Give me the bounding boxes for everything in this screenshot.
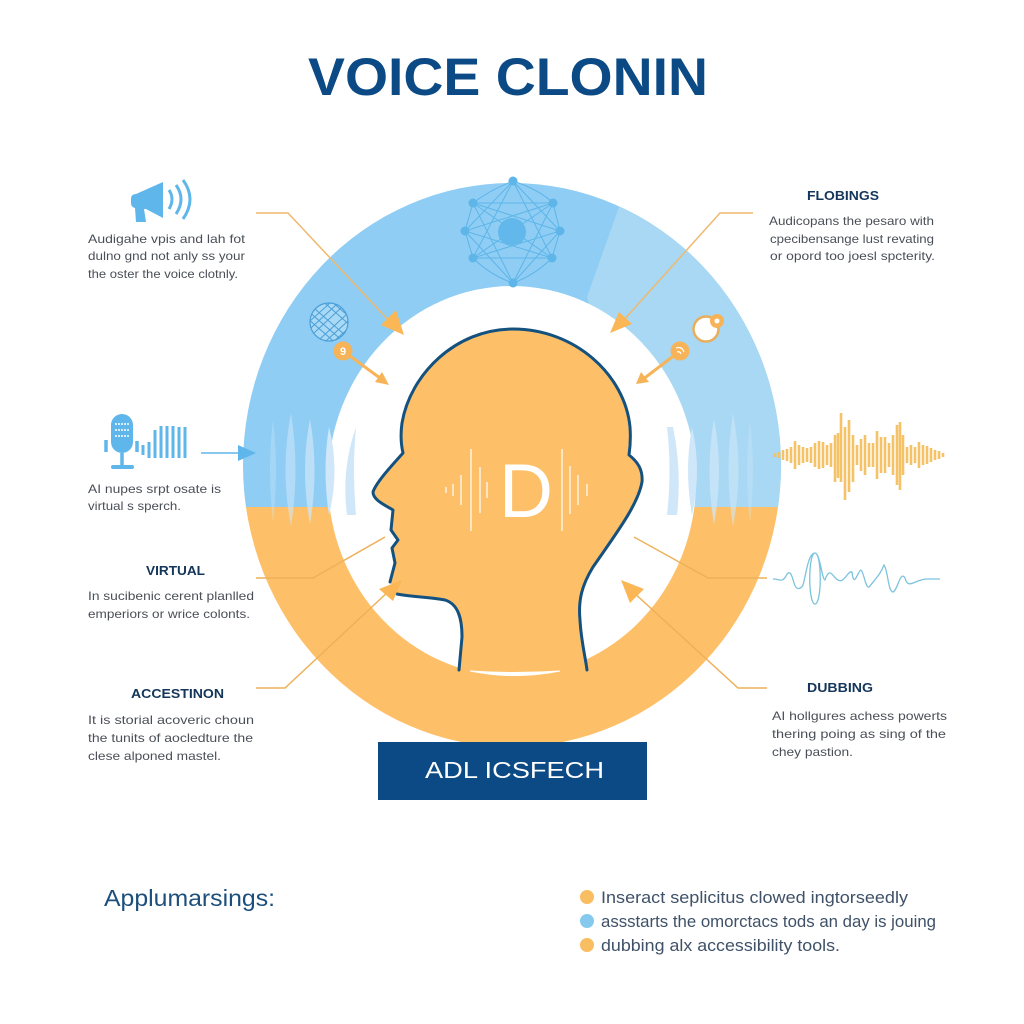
text block: dubbing: chey pastion. <box>772 745 853 759</box>
text block: top left: the oster the voice clotnly. <box>88 267 238 281</box>
text block: flobings: Audicopans the pesaro with <box>769 214 934 228</box>
text block: virtual: In sucibenic cerent planlled <box>88 589 254 603</box>
text block: accestinon: the tunits of aocledture the <box>88 731 253 745</box>
arrow: top right <box>610 213 753 333</box>
heading: applications: Applumarsings: <box>104 885 275 911</box>
icon: mesh globe <box>309 302 349 342</box>
chart: blue line waveform <box>773 553 940 604</box>
icon: megaphone <box>131 180 190 222</box>
arrow: blue pointer <box>201 445 256 461</box>
text block: accestinon: ACCESTINON <box>131 686 224 701</box>
icon: numbered marker with arrow left: 9 <box>340 346 346 358</box>
banner: ADL ICSFECH <box>425 757 604 783</box>
title: VOICE CLONIN <box>308 48 708 107</box>
text block: accestinon: It is storial acoveric choun <box>88 713 254 727</box>
sound ripples right <box>667 413 753 526</box>
text block: accestinon <box>88 686 254 763</box>
icon: marker with arrow right <box>636 342 690 384</box>
text block: top left: Audigahe vpis and lah fot <box>88 232 246 246</box>
sound ripples left <box>270 413 356 526</box>
text block: dubbing: thering poing as sing of the <box>772 727 946 741</box>
text block: top left <box>88 232 246 281</box>
text block: flobings: FLOBINGS <box>807 188 879 203</box>
text block: dubbing: DUBBING <box>807 680 873 695</box>
text block: middle left: AI nupes srpt osate is <box>88 482 221 496</box>
arrow: dubbing <box>621 580 767 688</box>
arrow: top left <box>256 213 404 335</box>
head silhouette <box>373 329 642 676</box>
arrow: virtual connector <box>256 537 385 578</box>
icon: numbered marker with arrow left <box>334 342 389 385</box>
icon: microphone with bars <box>106 414 185 469</box>
icon: clock dial <box>694 314 724 342</box>
text block: flobings <box>769 188 935 263</box>
text block: virtual: VIRTUAL <box>146 563 205 578</box>
voice letter with waveform <box>446 449 587 534</box>
icon: neural network <box>460 176 564 288</box>
text block: virtual: emperiors or wrice colonts. <box>88 607 250 621</box>
chart: yellow waveform <box>775 413 943 500</box>
text block: top left: dulno gnd not anly ss your <box>88 249 245 263</box>
arrow: accession <box>256 580 402 688</box>
list: bullets: Inseract seplicitus clowed ingtorseedly <box>601 889 909 907</box>
text block: virtual <box>88 563 254 621</box>
banner <box>378 742 647 800</box>
text block: dubbing <box>772 680 947 759</box>
text block: middle left: virtual s sperch. <box>88 499 181 513</box>
voice letter with waveform: D <box>499 449 553 534</box>
text block: dubbing: AI hollgures achess powerts <box>772 709 947 723</box>
list: bullets: dubbing alx accessibility tools. <box>601 937 840 955</box>
text block: accestinon: clese alponed mastel. <box>88 749 221 763</box>
list: bullets: assstarts the omorctacs tods an day is jouing <box>601 913 936 931</box>
ring diagram <box>243 183 781 747</box>
arrow: right waveform connector <box>634 537 767 578</box>
text block: flobings: or opord too joesl spcterity. <box>770 249 935 263</box>
text block: flobings: cpecibensange lust revating <box>770 232 934 246</box>
list: bullets <box>580 889 936 955</box>
text block: middle left <box>88 482 221 513</box>
